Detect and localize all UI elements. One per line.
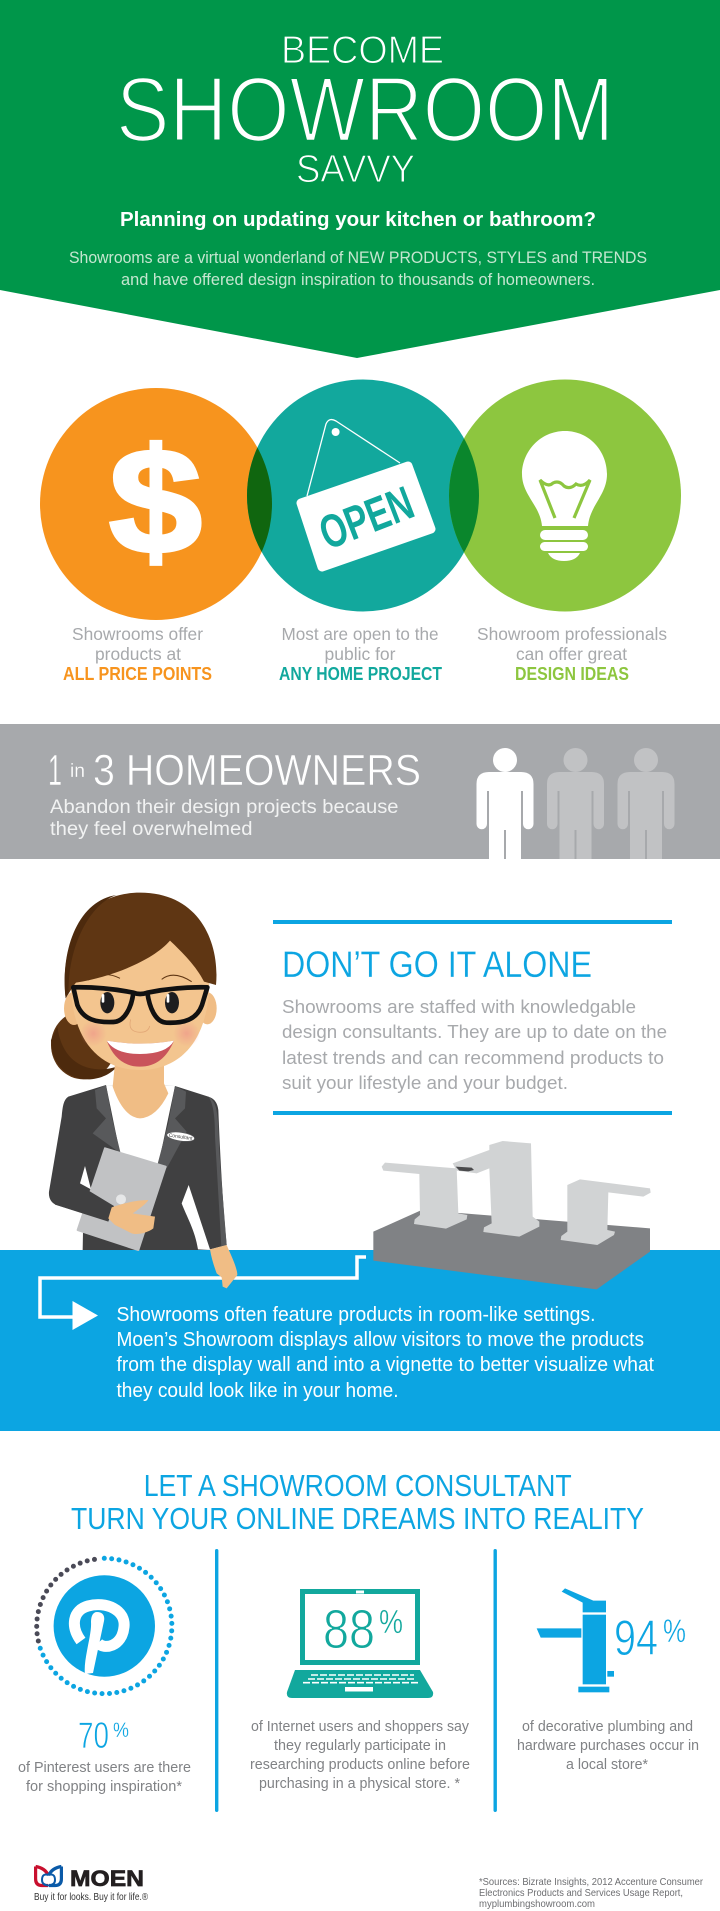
ears xyxy=(64,992,217,1025)
smile xyxy=(107,1041,174,1067)
caption: design ideas: Showroom professionals xyxy=(477,624,667,644)
shirt xyxy=(106,1085,175,1165)
sources xyxy=(479,1876,703,1910)
body text xyxy=(116,1304,654,1402)
icon: laptop xyxy=(287,1590,433,1698)
pinterest text xyxy=(18,1759,191,1795)
left handle xyxy=(382,1163,467,1229)
statistic text: Abandon their design projects because xyxy=(50,796,398,818)
holding hand xyxy=(108,1200,155,1234)
panel: pinterest statistic xyxy=(18,1558,191,1795)
70 percent: 70 xyxy=(78,1715,109,1756)
body text: design consultants. They are up to date on the xyxy=(282,1021,667,1042)
icon: light bulb xyxy=(522,431,607,561)
teal circle xyxy=(247,380,479,612)
subheading: Planning on updating your kitchen or bathroom? xyxy=(120,209,596,231)
face xyxy=(71,935,209,1070)
caption: design ideas: DESIGN IDEAS xyxy=(515,664,629,684)
statistic heading: in xyxy=(70,761,85,782)
statistic text xyxy=(50,796,398,840)
caption: home project: Most are open to the xyxy=(282,624,438,644)
sources: Electronics Products and Services Usage Report, xyxy=(479,1887,683,1899)
spout xyxy=(453,1141,539,1237)
panel: 1 in 3 homeowners xyxy=(0,724,720,859)
title xyxy=(116,29,614,191)
body text: Showrooms often feature products in room-like settings. xyxy=(116,1304,596,1326)
94 percent: % xyxy=(663,1613,686,1649)
body text: they could look like in your home. xyxy=(116,1380,398,1402)
94 percent: 94 xyxy=(614,1610,658,1666)
panel: blue showroom band xyxy=(0,1250,720,1431)
icon: open sign xyxy=(301,420,431,567)
body text: latest trends and can recommend products to xyxy=(282,1047,664,1068)
panel: circle captions xyxy=(63,624,667,684)
pinterest text: for shopping inspiration* xyxy=(26,1778,182,1795)
plumbing text: of decorative plumbing and xyxy=(522,1718,693,1735)
intro text: and have offered design inspiration to thousands of homeowners. xyxy=(121,271,595,289)
internet text: researching products online before xyxy=(250,1756,470,1773)
88 percent: 88 xyxy=(323,1598,375,1660)
caption: price points: products at xyxy=(95,644,181,664)
panel: three overlapping circles xyxy=(40,380,681,620)
cheeks xyxy=(80,1020,200,1047)
caption: price points: ALL PRICE POINTS xyxy=(63,664,212,684)
heading: DON’T GO IT ALONE xyxy=(282,944,592,985)
panel: internet shoppers statistic xyxy=(250,1590,470,1792)
internet text: they regularly participate in xyxy=(274,1737,446,1754)
intro text xyxy=(69,249,647,289)
jacket xyxy=(49,1085,227,1250)
tablet xyxy=(78,1148,166,1250)
icon: open sign: OPEN xyxy=(312,476,420,559)
panel: plumbing statistic xyxy=(517,1588,699,1773)
right handle xyxy=(561,1179,651,1245)
arrow xyxy=(40,1257,366,1330)
icon: dollar sign: $ xyxy=(109,417,202,585)
heading: let a showroom consultant xyxy=(71,1468,644,1536)
plumbing text: hardware purchases occur in xyxy=(517,1737,699,1754)
eyebrows xyxy=(88,975,192,982)
title: BECOME xyxy=(281,29,444,72)
resting hand xyxy=(210,1245,237,1288)
caption: design ideas: can offer great xyxy=(516,644,627,664)
icon: grey person xyxy=(618,748,674,859)
neck xyxy=(113,1063,168,1118)
caption: home project: public for xyxy=(324,644,396,664)
heading: let a showroom consultant: TURN YOUR ONLINE DREAMS INTO REALITY xyxy=(71,1501,644,1536)
88 percent: % xyxy=(379,1603,403,1640)
counter xyxy=(373,1210,650,1289)
nozzle xyxy=(456,1167,474,1171)
icon: pinterest xyxy=(37,1558,172,1694)
name badge: Consultant xyxy=(168,1133,193,1142)
statistic text: they feel overwhelmed xyxy=(50,818,252,840)
logo mark xyxy=(36,1866,61,1886)
body text: Showrooms are staffed with knowledgable xyxy=(282,996,636,1017)
sleeve shade xyxy=(208,1097,227,1246)
name badge xyxy=(166,1130,195,1143)
body text: Moen’s Showroom displays allow visitors to move the products xyxy=(116,1329,644,1351)
title: SAVVY xyxy=(296,148,415,191)
intro text: Showrooms are a virtual wonderland of NEW PRODUCTS, STYLES and TRENDS xyxy=(69,249,647,267)
plumbing text: a local store* xyxy=(566,1756,648,1773)
illustration: faucet on counter xyxy=(373,1141,651,1289)
sources: myplumbingshowroom.com xyxy=(479,1898,595,1910)
overlap teal green xyxy=(449,438,479,552)
caption: price points xyxy=(63,624,212,684)
nose xyxy=(130,1019,150,1032)
jacket gaps xyxy=(80,1166,210,1249)
title: SHOWROOM xyxy=(116,59,614,161)
body text: suit your lifestyle and your budget. xyxy=(282,1072,568,1093)
icon: grey person xyxy=(547,748,604,859)
plumbing text xyxy=(517,1718,699,1773)
orange circle xyxy=(40,388,272,620)
internet text: of Internet users and shoppers say xyxy=(251,1718,469,1735)
tagline: Buy it for looks. Buy it for life.® xyxy=(34,1892,149,1903)
hair bun xyxy=(51,1011,117,1079)
statistic heading: 3 HOMEOWNERS xyxy=(93,746,421,795)
forearm xyxy=(55,1178,114,1222)
heading: let a showroom consultant: LET A SHOWROOM CONSULTANT xyxy=(144,1468,572,1503)
header banner xyxy=(0,0,720,358)
caption: home project xyxy=(279,624,442,684)
illustration: consultant woman xyxy=(49,893,237,1288)
dividers xyxy=(215,1549,497,1812)
caption: home project: ANY HOME PROJECT xyxy=(279,664,442,684)
glasses xyxy=(73,987,207,1023)
wordmark: MOEN xyxy=(70,1866,144,1891)
internet text xyxy=(250,1718,470,1792)
70 percent: % xyxy=(113,1719,129,1742)
icon: white person xyxy=(476,748,534,859)
caption: design ideas xyxy=(477,624,667,684)
caption: price points: Showrooms offer xyxy=(72,624,203,644)
icon: faucet xyxy=(537,1588,614,1692)
logo: moen xyxy=(34,1866,149,1903)
overlap orange teal xyxy=(247,448,272,552)
statistic heading: 1 xyxy=(48,746,62,795)
panel: don't go it alone xyxy=(273,920,672,1115)
eyes xyxy=(100,992,179,1013)
green circle xyxy=(449,380,681,612)
hair xyxy=(65,893,216,998)
lapels xyxy=(93,1085,187,1168)
body text xyxy=(282,996,667,1093)
internet text: purchasing in a physical store. * xyxy=(259,1775,460,1792)
pinterest text: of Pinterest users are there xyxy=(18,1759,191,1776)
body text: from the display wall and into a vignette to better visualize what xyxy=(116,1354,654,1376)
